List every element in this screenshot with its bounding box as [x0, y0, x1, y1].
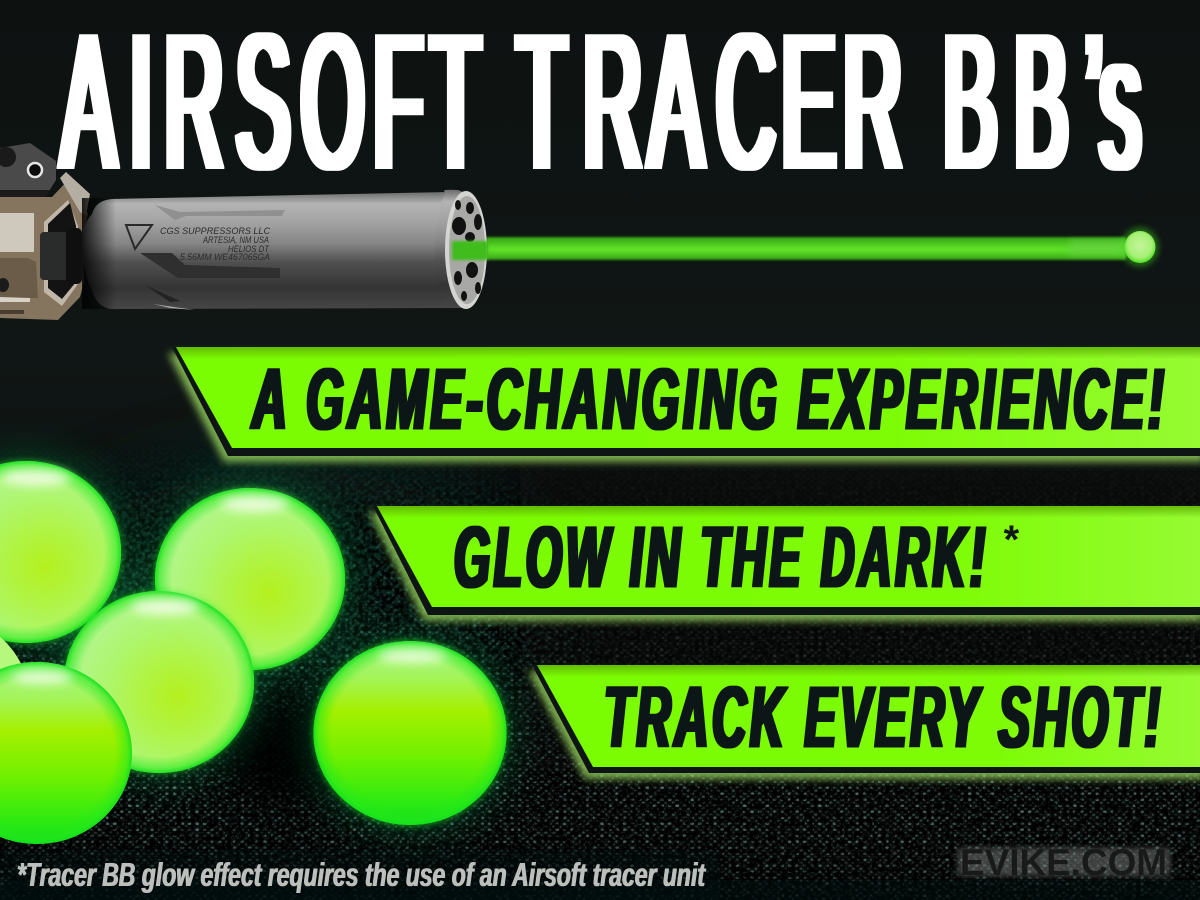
glowing BB cluster [0, 456, 510, 844]
muzzle glow [452, 241, 488, 260]
engraving: HELIOS DT [228, 244, 270, 254]
asterisk: * [1002, 518, 1020, 562]
muzzle collar [435, 190, 472, 308]
watermark: EVIKE.COM [960, 842, 1167, 883]
BB front right [312, 639, 508, 827]
cut panels [155, 205, 285, 220]
engraving [160, 226, 270, 262]
sight ring [28, 163, 42, 177]
banner: track every shot [528, 665, 1200, 779]
sight screw [0, 147, 16, 167]
rifle handguard [0, 143, 90, 320]
BB front left [0, 662, 132, 844]
BB far left [0, 613, 31, 795]
BB middle [63, 590, 255, 774]
banner: game-changing [168, 347, 1200, 462]
muzzle face [445, 191, 487, 309]
BB glow halo [0, 456, 510, 829]
footnote: *Tracer BB glow effect requires the use of an Airsoft tracer unit [17, 856, 706, 893]
engraving: 5.56MM WE467065GA [180, 252, 270, 262]
engraved logo [126, 225, 152, 249]
tracer beam [486, 227, 1159, 267]
tracer BB tip [1124, 231, 1156, 263]
title: AIRSOFT TRACER BB’s [61, 0, 1141, 210]
background [0, 448, 1200, 900]
BB back left [0, 460, 122, 644]
engraving: CGS SUPPRESSORS LLC [160, 226, 270, 236]
suppressor [82, 190, 488, 310]
ported holes [452, 200, 482, 301]
engraving: ARTESIA, NM USA [202, 235, 269, 245]
banner: glow in the dark [369, 506, 1200, 621]
BB back centre [154, 487, 346, 671]
